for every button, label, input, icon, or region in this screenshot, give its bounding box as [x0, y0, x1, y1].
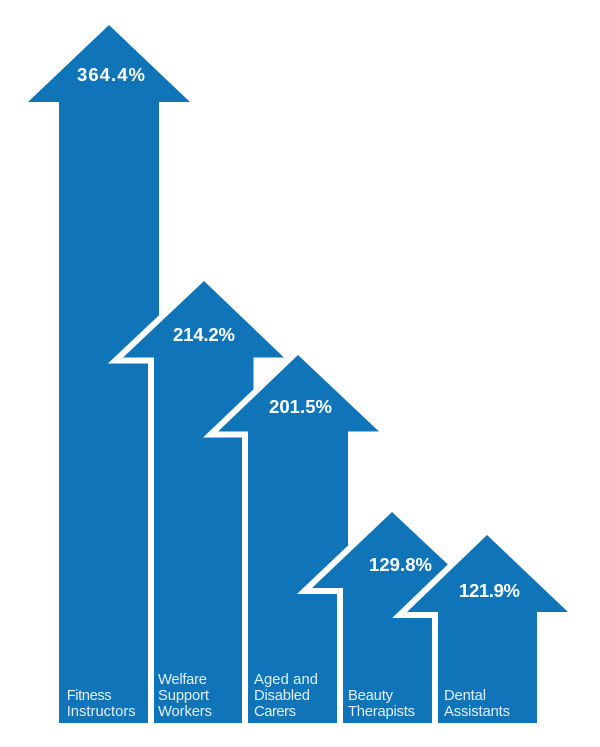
label: Welfare Support Workers: Welfare	[158, 672, 207, 688]
label: Beauty Therapists: Therapists	[348, 704, 415, 720]
label: Fitness Instructors	[67, 688, 136, 720]
value: 201.5%: 201.5%	[269, 396, 332, 417]
label: Dental Assistants: Assistants	[444, 704, 510, 720]
label: Fitness Instructors: Fitness	[67, 688, 112, 704]
label: Fitness Instructors: Instructors	[67, 704, 136, 720]
label: Beauty Therapists	[348, 688, 415, 720]
value: 364.4%: 364.4%	[77, 64, 145, 85]
value: 121.9%: 121.9%	[459, 580, 520, 601]
value: 214.2%: 214.2%	[173, 324, 235, 345]
label: Beauty Therapists: Beauty	[348, 688, 394, 704]
label: Dental Assistants	[444, 688, 510, 720]
label: Welfare Support Workers	[158, 672, 212, 720]
label: Welfare Support Workers: Support	[158, 688, 209, 704]
label: Aged and Disabled Carers: Disabled	[254, 688, 310, 704]
label: Welfare Support Workers: Workers	[158, 704, 212, 720]
value: 129.8%: 129.8%	[369, 554, 432, 575]
arrow: Aged and Disabled Carers	[218, 355, 379, 723]
arrow: Dental Assistants	[407, 535, 568, 723]
arrow: Welfare Support Workers	[123, 281, 284, 723]
label: Dental Assistants: Dental	[444, 688, 486, 704]
label: Aged and Disabled Carers: Carers	[254, 704, 296, 720]
arrow: Beauty Therapists	[312, 512, 473, 723]
label: Aged and Disabled Carers: Aged and	[254, 672, 318, 688]
arrow: Fitness Instructors	[28, 25, 190, 723]
label: Aged and Disabled Carers	[254, 672, 318, 720]
